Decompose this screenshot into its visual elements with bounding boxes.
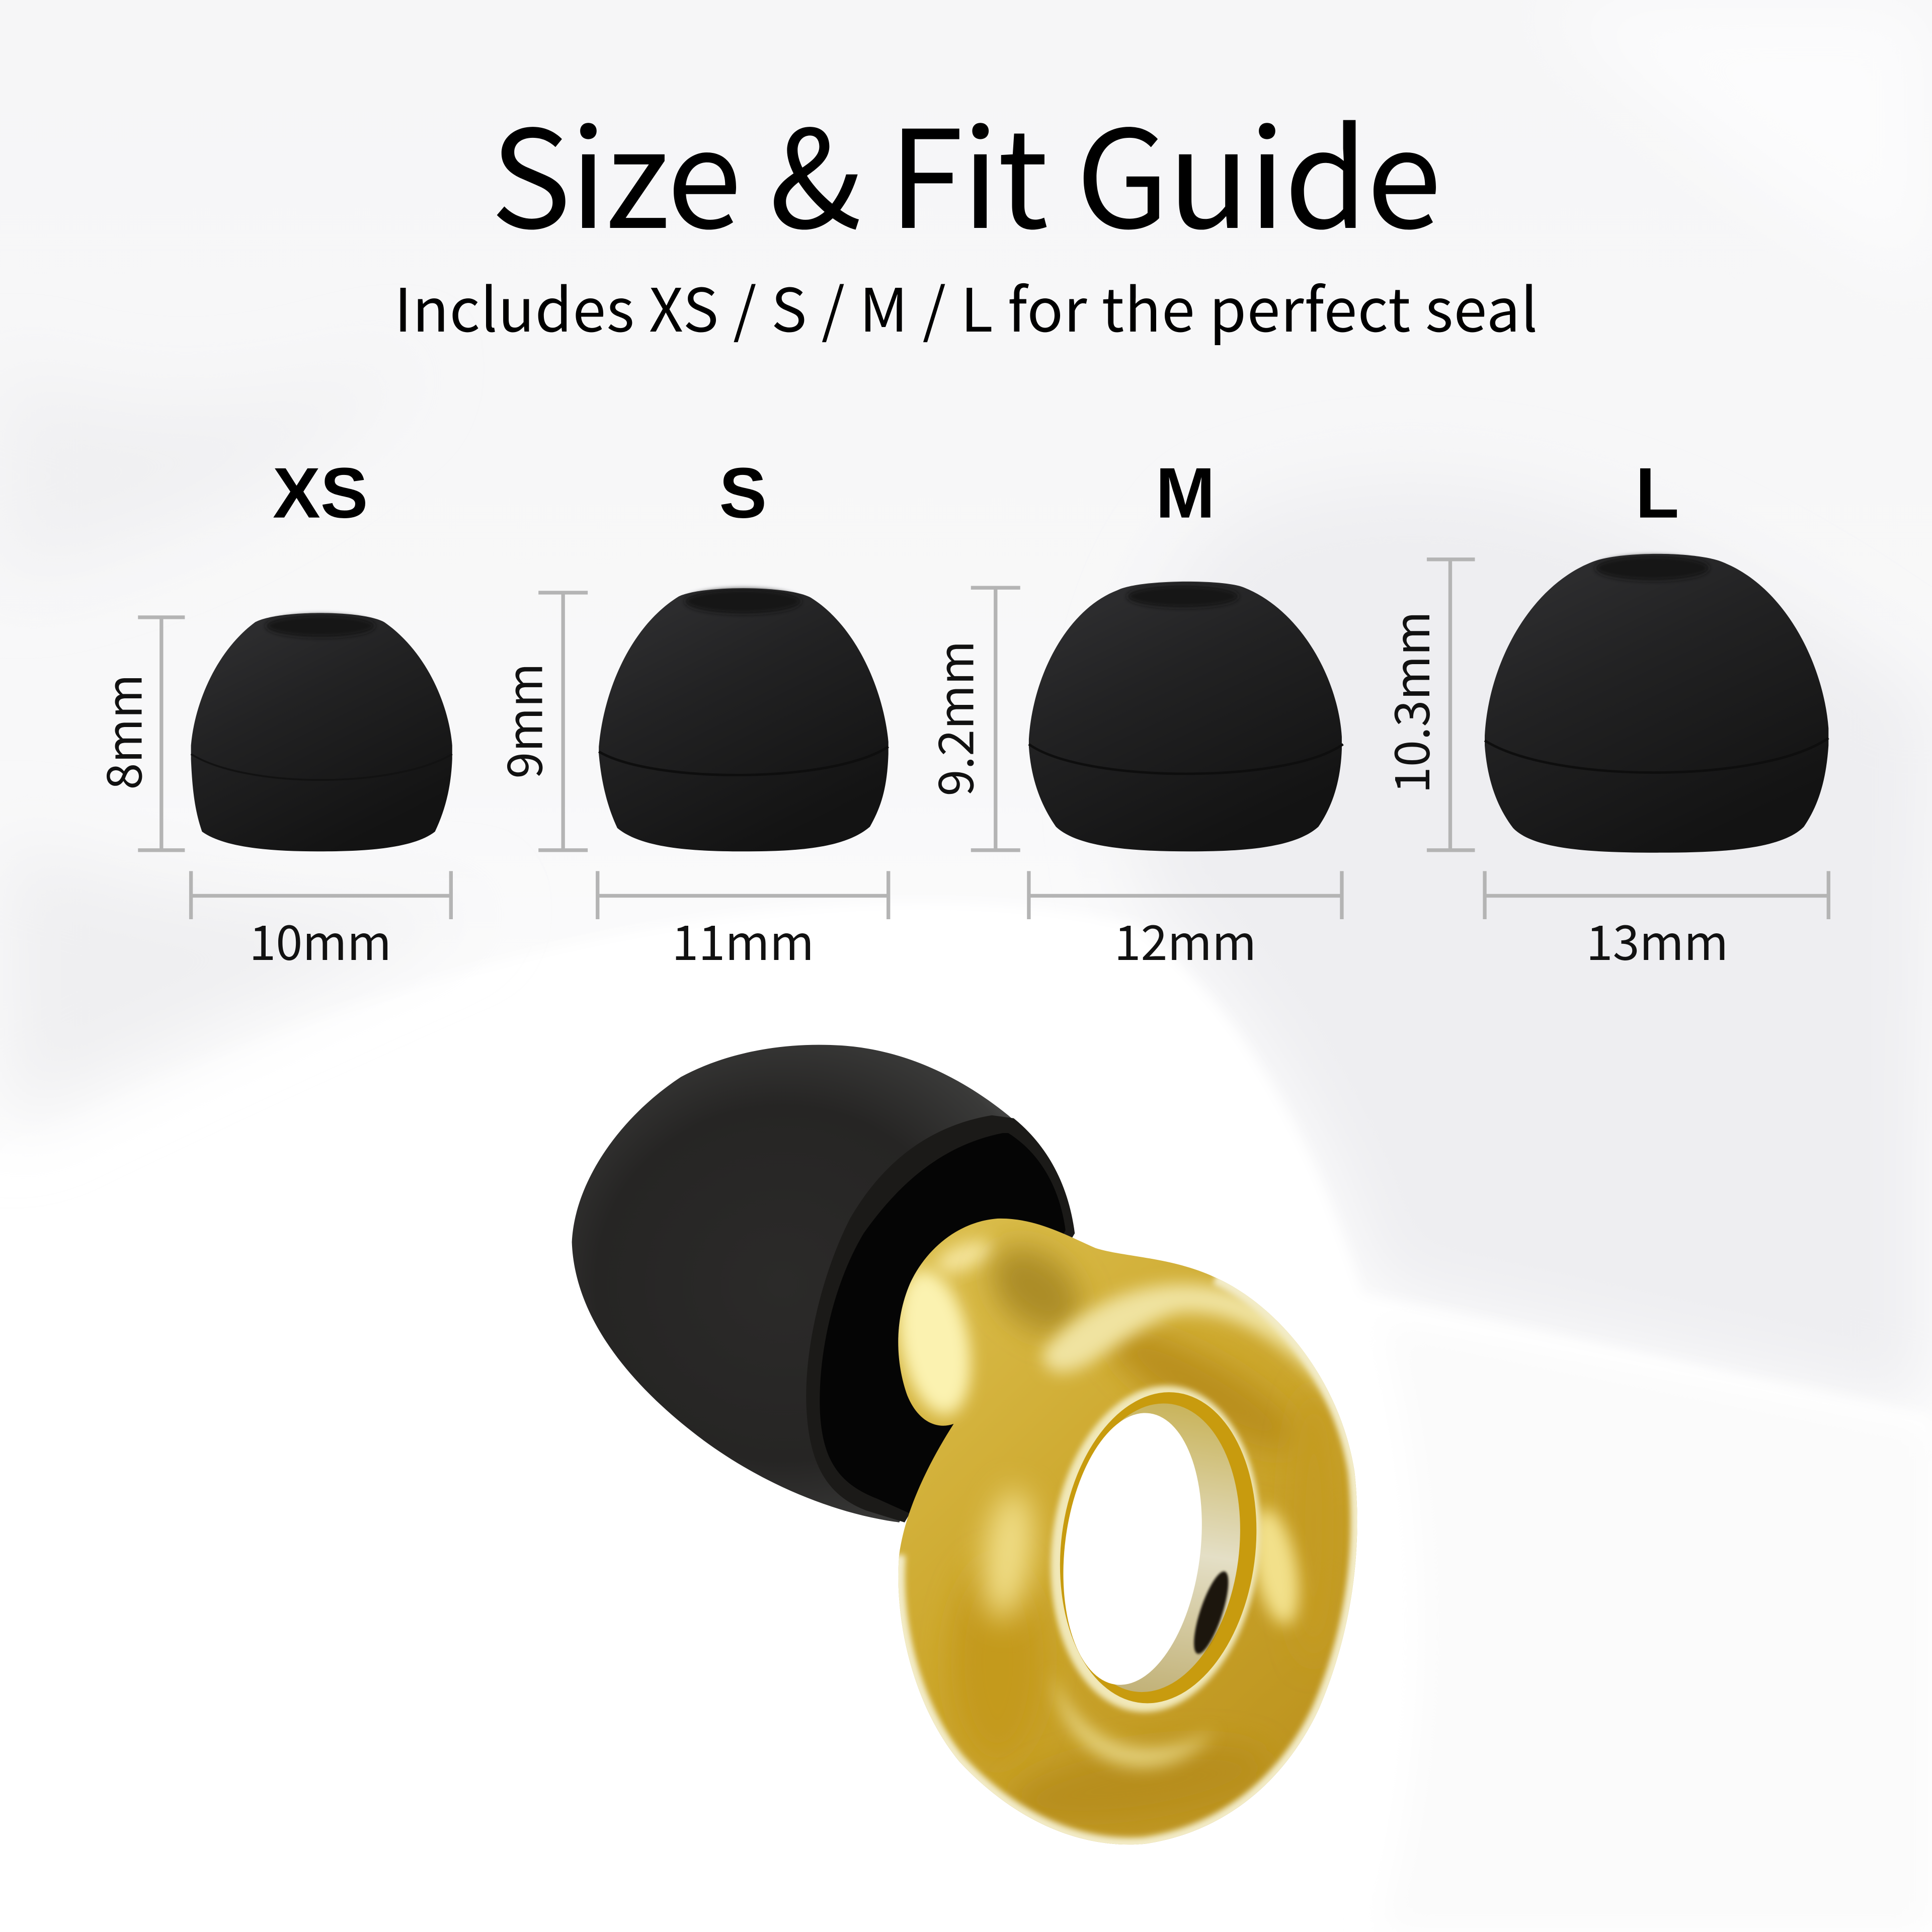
gold ring body [888, 1219, 1357, 1844]
height dimension: 10.3mm: 10.3mm [1374, 611, 1443, 793]
ring hole with inner reflection [1032, 1371, 1279, 1727]
ear tip: S [599, 588, 889, 851]
width dimension: 11mm: 11mm [672, 904, 814, 974]
label: S: S [719, 453, 767, 533]
height dimension: 9mm [487, 593, 588, 850]
height dimension: 8mm [86, 617, 185, 850]
height dimension: 9.2mm: 9.2mm [918, 640, 988, 796]
size column: L [1374, 453, 1828, 974]
width dimension: 12mm [1029, 871, 1342, 974]
height dimension: 10.3mm [1374, 559, 1475, 850]
label: L: L [1635, 453, 1679, 533]
title: Size & Fit Guide [491, 71, 1441, 267]
pale reflections [1041, 1284, 1341, 1407]
height dimension: 9.2mm [918, 588, 1020, 850]
shaded gold areas [977, 1230, 1094, 1349]
size column: M [918, 453, 1343, 974]
height dimension: 9mm: 9mm [487, 663, 556, 779]
ear tip: XS [191, 613, 452, 851]
subtitle: Includes XS / S / M / L for the perfect seal [394, 263, 1538, 349]
size column: S [487, 453, 889, 974]
dark reflection spot [1187, 1568, 1235, 1658]
ear tip: M [1029, 582, 1343, 851]
width dimension: 11mm [598, 871, 889, 974]
specular on neck top [932, 1235, 997, 1279]
width dimension: 13mm: 13mm [1586, 904, 1728, 974]
width dimension: 10mm [191, 871, 451, 974]
black silicone tip [572, 1045, 1075, 1522]
height dimension: 8mm: 8mm [86, 674, 156, 790]
width dimension: 10mm: 10mm [249, 904, 391, 974]
width dimension: 12mm: 12mm [1114, 904, 1256, 974]
label: XS: XS [273, 453, 368, 533]
width dimension: 13mm [1485, 871, 1828, 974]
label: M: M [1156, 453, 1215, 533]
size column: XS [86, 453, 452, 974]
product: gold loop earplug with black tip [572, 1045, 1357, 1844]
neck highlight [888, 1263, 982, 1422]
translucent pale outer edge [898, 1277, 1357, 1844]
ear tip: L [1485, 554, 1828, 853]
